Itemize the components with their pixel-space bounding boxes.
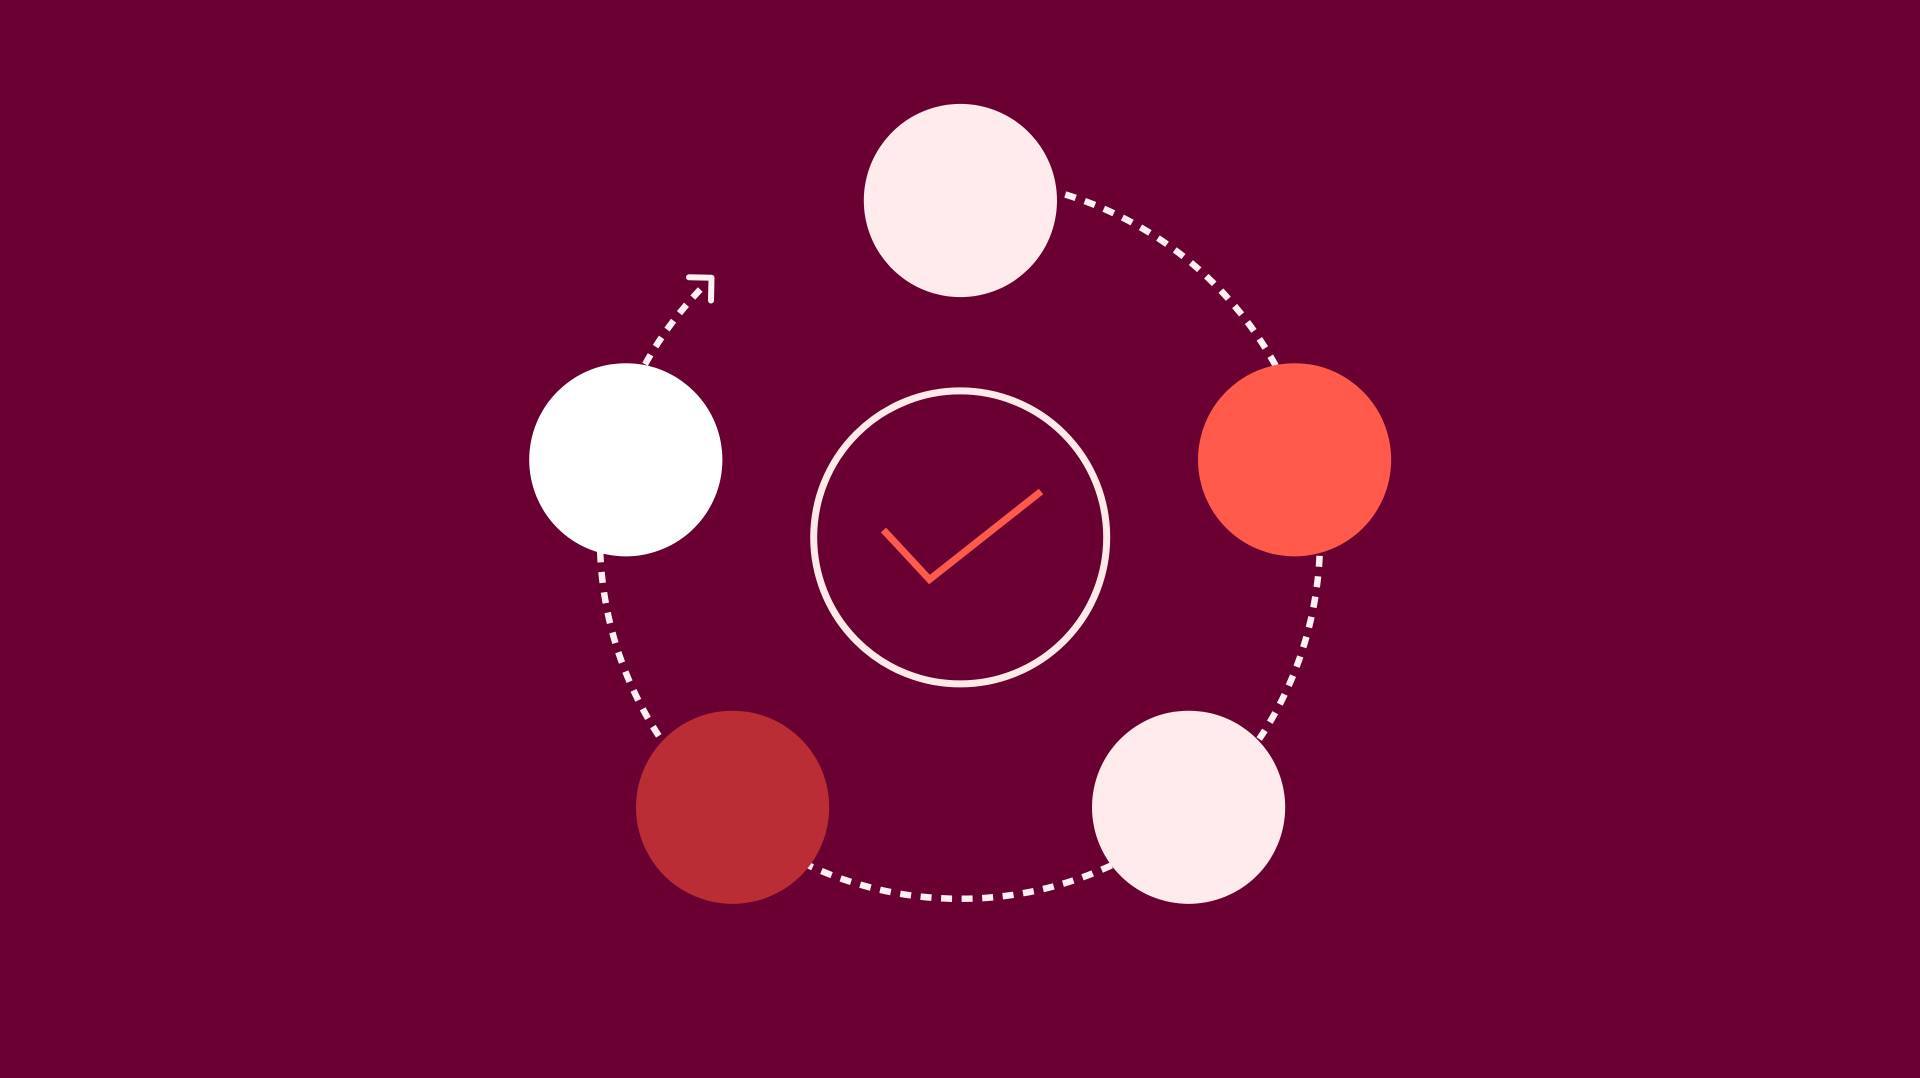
arrow: top to right segment <box>1065 194 1276 367</box>
circle: left, white <box>529 363 722 556</box>
circle: top, pale pink <box>864 104 1057 297</box>
centre badge: ring with check mark <box>814 391 1107 684</box>
arrow: right to bottom-right segment <box>1259 556 1320 739</box>
arrow: bottom-right to bottom-left segment <box>803 863 1112 899</box>
circle: right, coral <box>1198 363 1391 556</box>
icon: arrowhead <box>689 277 712 300</box>
circle: bottom left, brick red <box>636 711 829 904</box>
circle: bottom right, pale pink <box>1092 711 1285 904</box>
icon: check mark <box>884 492 1041 580</box>
centre ring <box>814 391 1107 684</box>
arrow: bottom-left to left segment <box>600 551 659 736</box>
arrow: left segment leading to arrowhead <box>645 289 701 364</box>
arrow: dashed ring segments connecting the circles <box>600 194 1320 899</box>
